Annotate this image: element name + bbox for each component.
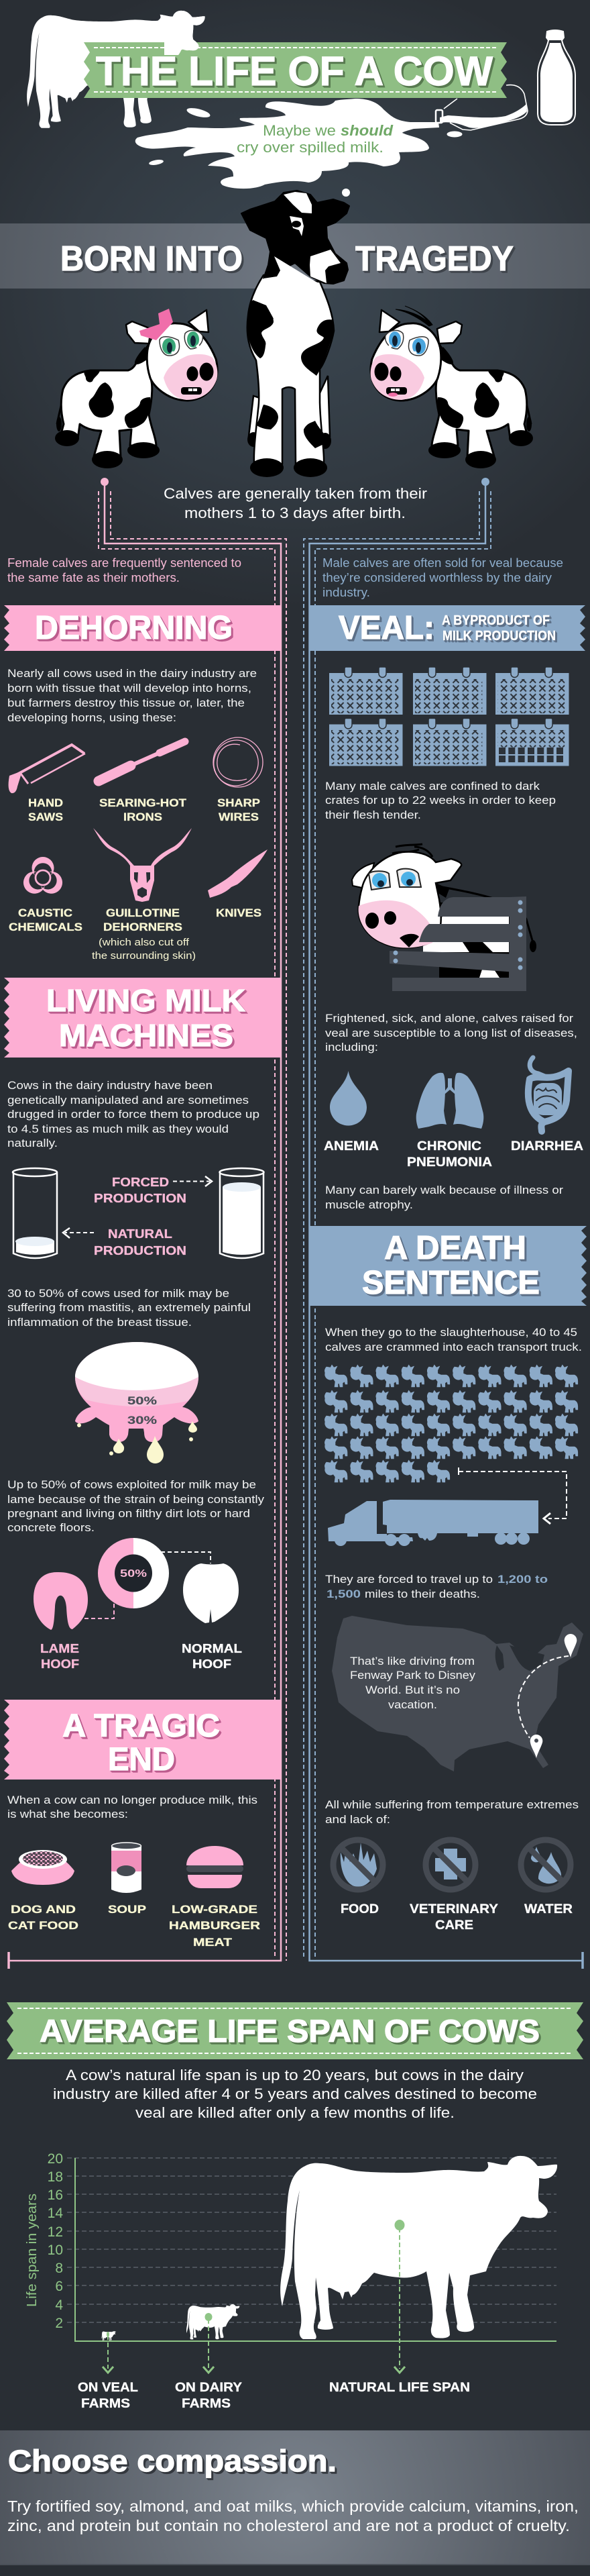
arrow: forced: [173, 1176, 212, 1186]
axes: [75, 2158, 556, 2341]
text block: distance: 1,200 to: [497, 1573, 548, 1586]
icon: biohazard: [19, 857, 66, 898]
panel: a tragic end: [4, 1700, 280, 1949]
blue path lines: [304, 478, 583, 1969]
text block: [7, 1079, 259, 1149]
labels: DEHORNERS: [103, 921, 182, 933]
icon: glass forced: [220, 1168, 264, 1258]
icon: male calf: [371, 306, 533, 468]
heading: born into tragedy: TRAGEDY: [355, 240, 514, 278]
text block: [325, 1012, 577, 1053]
icon: hand saw: [9, 745, 85, 793]
udder percent labels: 50%: [127, 1394, 157, 1407]
text block: [325, 780, 556, 821]
title banner: [84, 42, 507, 98]
text: tagline: should: [341, 122, 394, 139]
label: natural production: PRODUCTION: [94, 1244, 186, 1257]
panel: veal: [310, 605, 585, 1211]
heading: LIVING MILK: [46, 983, 245, 1018]
pink path lines: [9, 478, 286, 1969]
text block: [325, 1184, 563, 1211]
text block: Try fortified soy, almond, and oat milks, which provide calcium, vitamins, iron,: [7, 2497, 579, 2515]
labels: hooves: LAME: [40, 1642, 79, 1655]
axis numbers: 16: [48, 2187, 63, 2203]
crate: [390, 896, 526, 991]
donut chart: [98, 1538, 169, 1608]
axis numbers: 6: [55, 2279, 63, 2294]
ribbon stitching: [17, 2008, 573, 2053]
icon: cow head over banner: [164, 11, 205, 55]
text block: inflammation of the breast tissue.: [7, 1316, 192, 1329]
note: [92, 937, 196, 962]
labels: WATER: [524, 1902, 573, 1916]
ribbon: [7, 2002, 583, 2059]
text: calves taken: [164, 485, 427, 521]
text block: When they go to the slaughterhouse, 40 to 45: [325, 1326, 577, 1339]
icon: hamburger: [186, 1846, 243, 1888]
labels: [341, 1902, 573, 1933]
markers: [103, 2220, 405, 2373]
pin: Orlando: [530, 1735, 542, 1758]
text block: calves are crammed into each transport truck.: [325, 1341, 582, 1353]
text block: Many can barely walk because of illness or: [325, 1184, 563, 1196]
label: forced production: FORCED: [112, 1176, 169, 1189]
labels: GUILLOTINE: [106, 907, 180, 919]
ribbon: [310, 605, 585, 651]
icon: no veterinary care: [426, 1840, 475, 1890]
ribbon: [4, 605, 280, 651]
icon: pink bow: [139, 309, 173, 340]
heading: Choose compassion.: [8, 2444, 337, 2478]
icon: glass natural: [13, 1168, 57, 1258]
arrow: calves to truck: [459, 1467, 567, 1524]
icon: lame hoof: [34, 1572, 88, 1630]
labels: hooves: HOOF: [41, 1657, 79, 1671]
text block: [7, 1794, 257, 1820]
icon: spilled milk splash: [135, 85, 528, 197]
labels: CAUSTIC: [18, 907, 72, 919]
text block: zinc, and protein but contain no cholesterol and are not a product of cruelty.: [7, 2517, 570, 2534]
icon: veal calf: [102, 2331, 116, 2340]
map text: [350, 1655, 476, 1711]
text block: suffering from mastitis, an extremely painful: [7, 1301, 251, 1314]
labels: DOG AND: [11, 1903, 76, 1916]
text block: distance: 1,500: [327, 1588, 361, 1600]
labels: hooves: [40, 1642, 242, 1671]
icon: calendars: [329, 667, 569, 766]
text block: but farmers destroy this tissue or, later, the: [7, 697, 245, 709]
map text: Fenway Park to Disney: [350, 1669, 476, 1682]
udder percent labels: [127, 1394, 157, 1427]
text block: drugged in order to force them to produce up: [7, 1108, 259, 1121]
text block: to 4.5 times as much milk as they would: [7, 1123, 229, 1135]
labels: SOUP: [108, 1903, 146, 1916]
labels: [8, 1903, 260, 1949]
axis numbers: 14: [48, 2206, 63, 2221]
axis numbers: [48, 2151, 63, 2331]
heading: born into tragedy: [60, 240, 514, 278]
ribbon: [4, 1700, 280, 1780]
text block: When a cow can no longer produce milk, this: [7, 1794, 257, 1806]
ribbon: [4, 978, 280, 1058]
labels: LOW-GRADE: [172, 1903, 257, 1916]
labels: MEAT: [193, 1936, 233, 1949]
labels: FARMS: [182, 2397, 231, 2411]
map text: vacation.: [388, 1698, 437, 1711]
text block: veal are killed after only a few months of life.: [135, 2104, 455, 2121]
text: tagline: cry over spilled milk.: [237, 139, 384, 156]
text block: Frightened, sick, and alone, calves raised for: [325, 1012, 573, 1025]
band: born into tragedy: [0, 223, 590, 289]
text block: All while suffering from temperature extremes: [325, 1798, 579, 1811]
labels: FOOD: [341, 1902, 379, 1916]
text: male calves: industry.: [322, 586, 370, 599]
heading: AVERAGE LIFE SPAN OF COWS: [40, 2013, 540, 2049]
icon: anemia drop: [330, 1071, 367, 1126]
axis numbers: 18: [48, 2169, 63, 2185]
labels: FARMS: [81, 2397, 130, 2411]
axis numbers: 2: [55, 2316, 63, 2331]
text: female calves: Female calves are frequently sentenced to: [7, 556, 241, 570]
axis label: Life span in years: [25, 2194, 40, 2307]
labels: ANEMIA: [324, 1139, 379, 1153]
text: male calves: they’re considered worthless by the dairy: [322, 571, 552, 584]
icon: milk bottle: [538, 30, 575, 125]
title: THE LIFE OF A COW: [96, 48, 493, 94]
heading: A DEATH: [384, 1230, 526, 1266]
udder percent labels: 30%: [127, 1414, 157, 1427]
labels: CAT FOOD: [8, 1919, 78, 1932]
chart: life span: [25, 2151, 557, 2411]
text: tagline: Maybe we: [263, 122, 336, 139]
text: calves taken: mothers 1 to 3 days after birth.: [184, 505, 406, 521]
labels: CHEMICALS: [9, 921, 82, 933]
icon: normal hoof: [183, 1563, 239, 1623]
icon: no food: [333, 1840, 383, 1890]
text block: [7, 1287, 251, 1329]
label: natural production: [94, 1227, 186, 1257]
labels: KNIVES: [216, 907, 261, 919]
labels: CARE: [435, 1918, 473, 1933]
text: calves taken: Calves are generally taken from their: [164, 485, 427, 502]
heading: DEHORNING: [35, 610, 233, 646]
subheading: A BYPRODUCT OF: [442, 613, 550, 628]
text: female calves: [7, 556, 241, 584]
labels: IRONS: [123, 811, 162, 823]
route: [518, 1656, 569, 1738]
note: the surrounding skin): [92, 951, 196, 962]
text block: veal are susceptible to a long list of diseases,: [325, 1027, 577, 1039]
gridlines: [67, 2158, 556, 2322]
icon: calf in crate: [352, 844, 536, 991]
axis numbers: 4: [55, 2298, 63, 2313]
labels: SEARING-HOT: [99, 796, 187, 809]
text: tagline: [237, 122, 394, 156]
icon: pink tongue: [388, 393, 398, 397]
arrow: natural: [63, 1228, 94, 1238]
heading: born into tragedy: BORN INTO: [60, 240, 243, 278]
icon grid: 45 calves: [324, 1365, 578, 1482]
heading: END: [108, 1742, 175, 1778]
heading: SENTENCE: [362, 1265, 540, 1301]
text block: crates for up to 22 weeks in order to keep: [325, 794, 556, 807]
icon: dairy cow: [186, 2304, 239, 2339]
mother cow head: [241, 191, 349, 321]
labels: NATURAL LIFE SPAN: [329, 2381, 470, 2395]
labels: ON VEAL: [78, 2381, 138, 2395]
heading: A TRAGIC: [62, 1708, 220, 1744]
labels: [9, 796, 261, 933]
panel: a death sentence: [310, 1226, 587, 1933]
map: USA: [332, 1616, 583, 1771]
axis numbers: 8: [55, 2261, 63, 2276]
text: male calves: Male calves are often sold for veal because: [322, 556, 563, 570]
text block: muscle atrophy.: [325, 1198, 413, 1211]
text: male calves: [322, 556, 563, 599]
icon: intestines: [528, 1058, 569, 1131]
text block: is what she becomes:: [7, 1808, 128, 1820]
panel: dehorning: [4, 605, 280, 962]
icon: udder chart: [75, 1342, 198, 1463]
text block: [7, 1478, 265, 1534]
labels: hooves: NORMAL: [182, 1642, 242, 1655]
text block: distance: [325, 1573, 548, 1600]
icon: searing-hot iron: [99, 741, 185, 781]
map text: World. But it’s no: [365, 1684, 460, 1696]
axis numbers: 12: [48, 2224, 63, 2240]
panel: choose compassion: [0, 2430, 590, 2565]
icon: female calf: [55, 309, 217, 468]
labels: HAND: [28, 796, 63, 809]
labels: WIRES: [219, 811, 259, 823]
text: female calves: the same fate as their mothers.: [7, 571, 180, 584]
labels: [78, 2381, 470, 2411]
panel: living milk machines: [4, 978, 280, 1671]
heading: [46, 983, 245, 1053]
text block: Nearly all cows used in the dairy industry are: [7, 667, 257, 680]
text block: [325, 1326, 582, 1353]
text block: their flesh tender.: [325, 809, 421, 821]
icon: knife: [208, 849, 268, 898]
panel: average life span: [7, 2002, 583, 2411]
text block: born with tissue that will develop into horns,: [7, 682, 251, 694]
pin: Boston: [565, 1634, 577, 1657]
text block: developing horns, using these:: [7, 711, 176, 724]
text block: concrete floors.: [7, 1521, 95, 1534]
labels: SHARP: [217, 796, 260, 809]
axis numbers: 20: [48, 2151, 63, 2167]
text block: distance: miles to their deaths.: [365, 1588, 480, 1600]
text block: [7, 667, 257, 724]
labels: DIARRHEA: [511, 1139, 583, 1153]
background glow: [0, 0, 590, 604]
note: (which also cut off: [99, 937, 190, 948]
labels: ON DAIRY: [175, 2381, 242, 2395]
text block: distance: They are forced to travel up to: [325, 1573, 493, 1586]
label: forced production: PRODUCTION: [94, 1192, 186, 1205]
subheading: MILK PRODUCTION: [442, 629, 556, 643]
labels: VETERINARY: [410, 1902, 498, 1916]
subheading: [442, 613, 556, 643]
labels: CHRONIC: [417, 1139, 481, 1153]
label: forced production: [94, 1176, 186, 1205]
heading: [62, 1708, 220, 1778]
labels: HAMBURGER: [169, 1919, 260, 1932]
text block: and lack of:: [325, 1813, 390, 1826]
icon: sharp wires: [207, 734, 265, 792]
icon: hair tuft: [396, 306, 432, 326]
icon: lungs: [416, 1073, 483, 1129]
labels: hooves: HOOF: [192, 1657, 231, 1671]
text block: 30 to 50% of cows used for milk may be: [7, 1287, 229, 1300]
labels: [324, 1139, 583, 1170]
icon: soup can: [111, 1843, 141, 1893]
heading: VEAL:: [339, 610, 434, 646]
connector dashes: [84, 1552, 211, 1618]
text block: industry are killed after 4 or 5 years and calves destined to become: [53, 2085, 537, 2102]
text block: genetically manipulated and are sometimes: [7, 1094, 249, 1106]
text block: [53, 2067, 537, 2121]
heading: MACHINES: [59, 1018, 233, 1053]
text block: including:: [325, 1041, 378, 1053]
icon: natural cow: [280, 2156, 557, 2339]
label: natural production: NATURAL: [108, 1227, 172, 1241]
donut chart: 50%: [120, 1568, 147, 1580]
text block: Cows in the dairy industry have been: [7, 1079, 213, 1092]
icon: no water: [521, 1840, 571, 1890]
icon: cow silhouette behind title: [27, 11, 205, 128]
ribbon: [310, 1226, 587, 1306]
text block: [325, 1798, 579, 1826]
text block: Many male calves are confined to dark: [325, 780, 540, 792]
axis numbers: 10: [48, 2243, 63, 2258]
labels: SAWS: [28, 811, 63, 823]
labels: PNEUMONIA: [407, 1155, 492, 1170]
heading: [362, 1230, 540, 1301]
icon: guillotine dehorner: [93, 828, 192, 902]
text block: [7, 2497, 579, 2534]
icon: pet food bowl: [11, 1850, 74, 1885]
map text: That’s like driving from: [350, 1655, 475, 1667]
icon: truck: [328, 1500, 538, 1546]
text block: pregnant and living on filthy dirt lots or hard: [7, 1507, 250, 1520]
text block: A cow’s natural life span is up to 20 years, but cows in the dairy: [66, 2067, 524, 2083]
text block: Up to 50% of cows exploited for milk may be: [7, 1478, 256, 1491]
icon: mother cow: [241, 191, 349, 477]
text block: naturally.: [7, 1137, 58, 1149]
text block: lame because of the strain of being constantly: [7, 1493, 265, 1506]
